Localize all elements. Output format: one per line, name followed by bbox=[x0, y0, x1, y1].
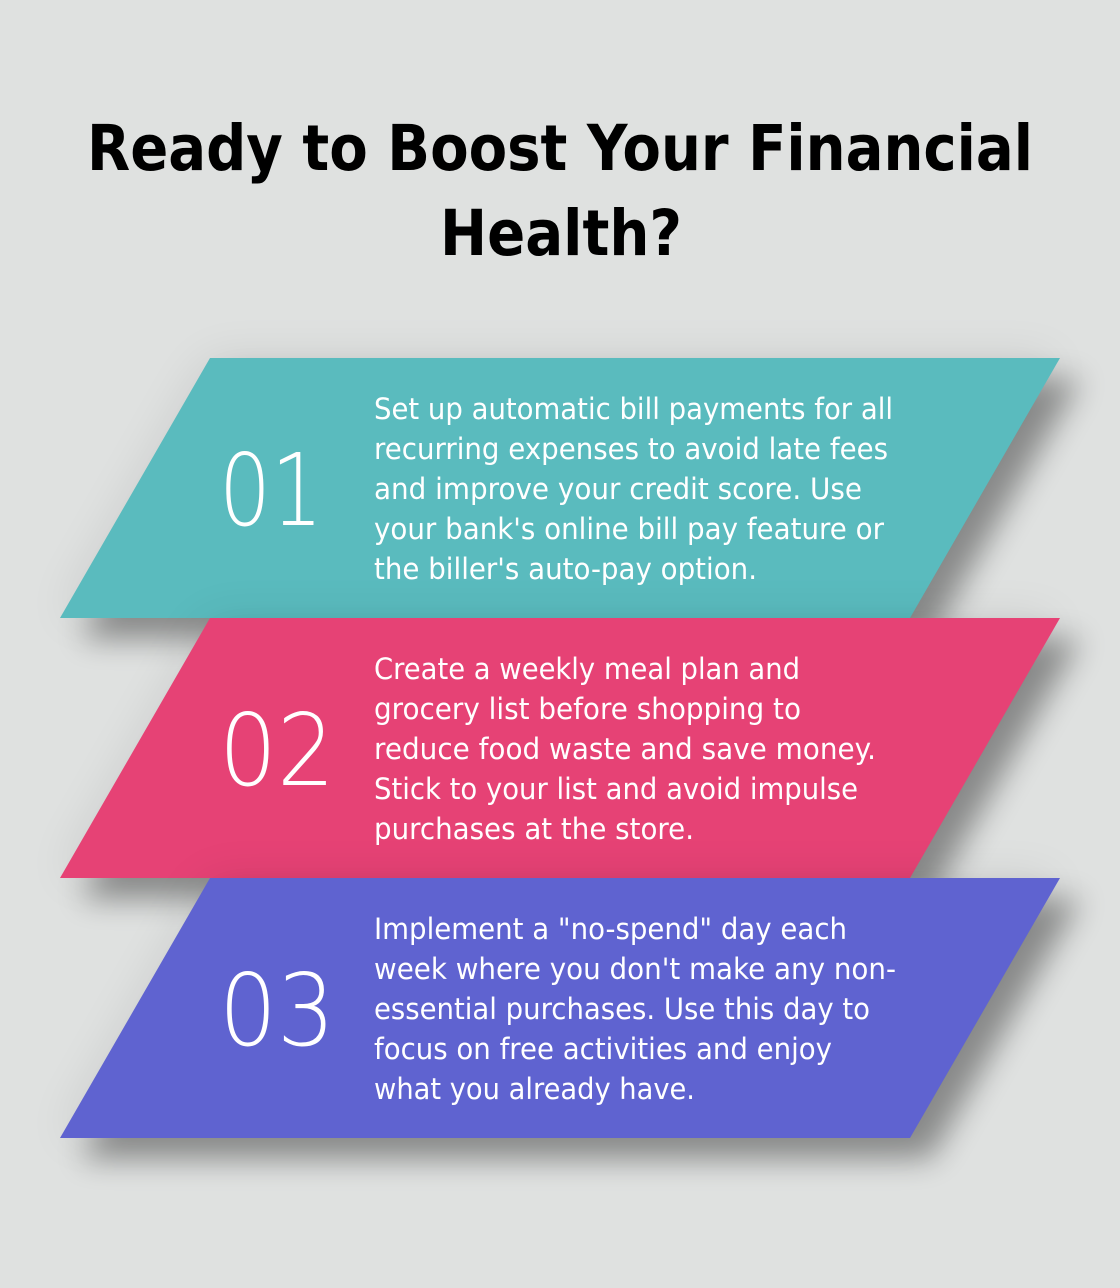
step 01 description: Set up automatic bill payments for all bbox=[374, 392, 893, 426]
panel: step 02 bbox=[60, 618, 1081, 899]
step 02 description: grocery list before shopping to bbox=[374, 692, 801, 726]
step 02 description: Stick to your list and avoid impulse bbox=[374, 772, 858, 806]
step 03 description: essential purchases. Use this day to bbox=[374, 992, 870, 1026]
step 03 description: what you already have. bbox=[374, 1072, 695, 1106]
step 03 description: focus on free activities and enjoy bbox=[374, 1032, 832, 1066]
step number 02: 02 bbox=[219, 692, 335, 809]
step 02 description bbox=[374, 652, 876, 846]
panel: step 01 bbox=[60, 358, 1081, 639]
step 03 description bbox=[374, 912, 896, 1106]
step 02 description: purchases at the store. bbox=[374, 812, 694, 846]
step 01 description bbox=[374, 392, 893, 586]
step 01 description: recurring expenses to avoid late fees bbox=[374, 432, 888, 466]
step 02 description: reduce food waste and save money. bbox=[374, 732, 876, 766]
step number 01: 01 bbox=[219, 432, 323, 549]
step 01 description: and improve your credit score. Use bbox=[374, 472, 862, 506]
title bbox=[87, 112, 1033, 270]
title: Health? bbox=[440, 197, 682, 270]
step number 03: 03 bbox=[219, 952, 335, 1069]
panel: step 03 bbox=[60, 878, 1081, 1159]
title: Ready to Boost Your Financial bbox=[87, 112, 1033, 185]
step 03 description: Implement a "no-spend" day each bbox=[374, 912, 847, 946]
step 03 description: week where you don't make any non- bbox=[374, 952, 896, 986]
step 01 description: the biller's auto-pay option. bbox=[374, 552, 757, 586]
step 01 description: your bank's online bill pay feature or bbox=[374, 512, 884, 546]
step 02 description: Create a weekly meal plan and bbox=[374, 652, 800, 686]
